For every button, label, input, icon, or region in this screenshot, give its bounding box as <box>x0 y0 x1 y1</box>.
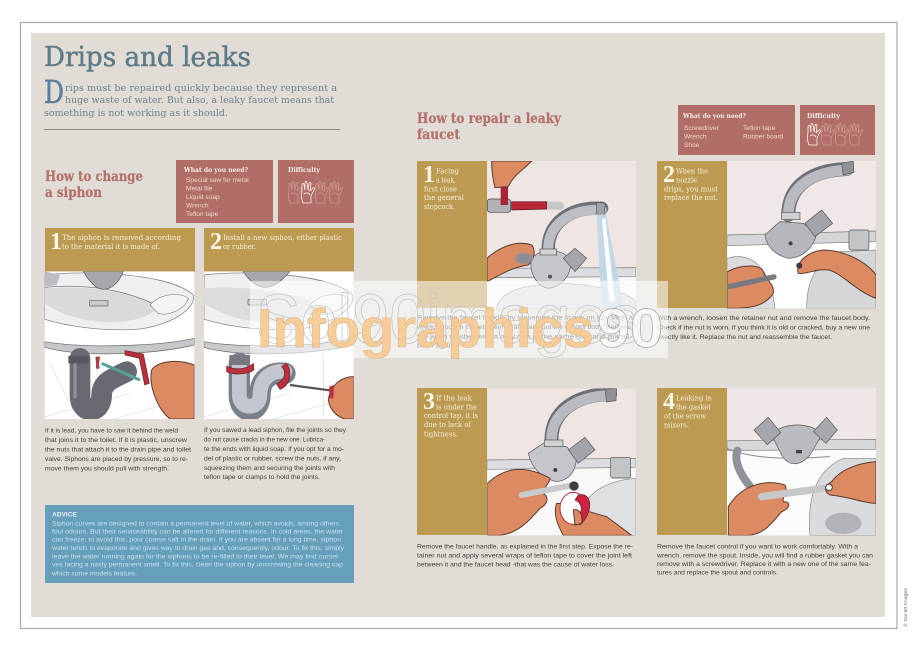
illustration: replacing the rubber gasket of the screw mixer <box>727 388 876 535</box>
step 3: faucet header: 3 <box>423 389 435 415</box>
step 2: faucet header: nozzle <box>676 176 697 184</box>
text: faucet step 3 <box>417 544 633 568</box>
step 3: faucet header: is under the <box>436 404 477 412</box>
text: faucet step 4: Remove the faucet control if you want to work comfortably. With a <box>657 544 858 550</box>
text: faucet step 3: Remove the faucet handle, as explained in the first step. Expose the re- <box>417 544 633 550</box>
step 1: siphon header: to the material it is made of. <box>62 243 160 251</box>
step 1: faucet header: the general <box>424 194 465 202</box>
text: faucet step 2: exactly like it. Replace the nut and reassemble the faucet. <box>657 334 832 341</box>
callout: advice: leave the water running again for the siphons to be re-filled to their level. We may find oursel- <box>52 554 340 560</box>
step 4: faucet header: the gasket <box>676 404 711 412</box>
watermark: Sol90images <box>256 280 641 358</box>
text: faucet step 2: With a wrench, loosen the retainer nut and remove the faucet body. <box>657 315 870 322</box>
step 1: siphon header: The siphon is removed according <box>62 234 182 242</box>
intro text: rips must be repaired quickly because they represent a <box>65 83 337 94</box>
illustration: wrapping teflon tape around the nut <box>487 388 636 535</box>
panel: tools needed for the faucet: What do you need? <box>682 113 746 120</box>
text: siphon step 2: If you sawed a lead siphon, file the joints so they <box>204 427 347 434</box>
callout: advice <box>45 505 354 583</box>
text: siphon step 1: valve. Siphons are placed by pressure, so to re- <box>45 456 188 463</box>
panel: tools needed for the faucet: Wrench <box>684 134 707 140</box>
panel: difficulty of the faucet job <box>800 105 875 155</box>
heading: how to repair a leaky faucet <box>417 111 562 143</box>
panel: tools needed for the faucet: Teflon tape <box>743 125 776 132</box>
step 2: siphon header <box>204 228 354 272</box>
callout: advice: can freeze; to avoid this, pour coarse salt in the drain. If you are absent for a long time, siphon <box>52 536 341 544</box>
heading: how to repair a leaky faucet: How to repair a leaky <box>417 111 562 127</box>
step 2: siphon header: Install a new siphon, either plastic <box>223 234 342 242</box>
text: siphon step 1 <box>45 428 191 472</box>
text: faucet step 1 <box>416 314 633 350</box>
watermark: 90 <box>597 297 663 359</box>
panel: tools needed for the siphon <box>176 160 273 223</box>
text: siphon step 2: te the ends with liquid soap. If you opt for a mo- <box>204 446 344 453</box>
heading: how to change a siphon: How to change <box>45 169 143 185</box>
intro text: something is not working as it should. <box>44 108 228 119</box>
text: faucet step 3: between it and the faucet head -that was the cause of water loss. <box>417 562 614 568</box>
illustration: closing the stopcock with the faucet running <box>487 161 636 308</box>
panel: tools needed for the siphon: Teflon tape <box>186 211 219 218</box>
step 1: siphon header <box>45 228 195 272</box>
text: siphon step 1: move them you should pull with strength. <box>45 466 169 472</box>
panel: difficulty of the siphon job <box>278 160 354 223</box>
panel: tools needed for the siphon: What do you need? <box>183 167 248 174</box>
text: siphon step 2: teflon tape or clamps to hold the joints. <box>204 474 320 481</box>
text: faucet step 1: the worn washer with a new one of the same size and put all <box>417 334 630 340</box>
step 2: faucet header: 2 <box>663 162 675 188</box>
text: faucet step 1: back again. <box>417 342 457 350</box>
step 4: faucet header: of the screw <box>664 412 706 420</box>
step 2: faucet header: replace the nut. <box>664 194 718 202</box>
callout: advice: water tends to evaporate and gives way to drain gas and, consequently, odour. To fix this, simply <box>51 545 345 552</box>
text: siphon step 2: del of plastic or rubber, screw the nuts, if any, <box>204 456 341 462</box>
panel: tools needed for the faucet: Shoe <box>684 142 700 149</box>
step 2: faucet header: When the <box>676 168 708 176</box>
step 1: faucet header: a leak, <box>436 176 456 184</box>
step 1: faucet header: 1 <box>423 162 435 188</box>
text: faucet step 2 <box>657 315 870 341</box>
illustration: replacing the faucet nut <box>727 161 876 308</box>
step 3: faucet header: If the leak <box>436 394 473 402</box>
step 4: faucet header: 4 <box>663 389 675 415</box>
step 1: faucet header <box>417 161 487 308</box>
step 3: faucet header: due to lack of <box>424 421 472 429</box>
callout: advice: foul odours. But their serviceability can be altered for different reasons. In cold areas, the water <box>52 528 344 536</box>
watermark: Infographics <box>257 297 594 359</box>
text: faucet step 4: remove with a screwdriver. Replace it with a new one of the same fea- <box>657 561 871 568</box>
panel: tools needed for the siphon: Wrench <box>186 202 209 210</box>
text: siphon step 1: If it is lead, you have to saw it behind the weld <box>45 428 178 434</box>
step 1: faucet header: first close <box>424 186 457 194</box>
title: Drips and leaks <box>44 42 251 73</box>
step 2: siphon header: 2 <box>210 229 222 255</box>
step 4: faucet header <box>657 388 727 535</box>
text: siphon step 1: the nuts that attach it to the drain pipe and toilet <box>45 446 191 454</box>
step 2: siphon header: or rubber. <box>223 243 256 251</box>
callout: advice: Siphon curves are designed to contain a permanent level of water, which avoids, among others, <box>52 520 341 528</box>
step 2: faucet header: drips, you must <box>664 186 718 194</box>
illustration: sink with new siphon and clamps <box>204 271 354 419</box>
step 2: faucet header <box>657 161 727 308</box>
intro text: huge waste of water. But also, a leaky faucet means that <box>65 95 334 106</box>
step 1: siphon header: 1 <box>50 229 62 255</box>
heading: how to change a siphon <box>45 169 143 201</box>
step 3: faucet header <box>417 388 487 535</box>
step 1: faucet header: stopcock. <box>424 203 455 211</box>
panel: tools needed for the siphon: Metal file <box>186 186 213 192</box>
step 1: faucet header: Facing <box>436 168 459 176</box>
text: siphon step 2 <box>204 427 347 481</box>
step 3: faucet header: tightness. <box>424 430 458 438</box>
text: faucet step 3: tainer nut and apply several wraps of teflon tape to cover the joint left <box>417 552 632 560</box>
callout: advice: ADVICE <box>52 512 78 518</box>
text: siphon step 2: do not cause cracks in the new one. Lubrica- <box>204 436 325 444</box>
text: faucet step 4 <box>656 544 873 576</box>
text: faucet step 4: wrench, remove the spout. Inside, you will find a rubber gasket you can <box>656 552 873 560</box>
panel: tools needed for the siphon: Liquid soap <box>186 194 220 201</box>
heading: how to change a siphon: a siphon <box>45 185 102 201</box>
panel: tools needed for the siphon: Special saw for metal <box>186 177 249 184</box>
heading: how to repair a leaky faucet: faucet <box>417 127 461 143</box>
copyright note: © Sol 90 Images <box>902 587 908 627</box>
text: faucet step 2: Check if the nut is worn. If you think it is old or cracked, buy a new one <box>657 324 870 332</box>
step 4: faucet header: mixers. <box>664 422 689 430</box>
panel: tools needed for the faucet: Screwdriver <box>684 125 720 132</box>
panel: difficulty of the siphon job: Difficulty <box>288 167 320 174</box>
intro text <box>44 73 337 119</box>
step 4: faucet header: Leaking in <box>676 394 712 402</box>
panel: difficulty of the faucet job: Difficulty <box>807 113 840 120</box>
text: siphon step 1: that joins it to the toilet. If it is plastic, unscrew <box>45 437 187 444</box>
text: faucet step 4: tures and replace the spout and controls. <box>657 570 778 576</box>
step 3: faucet header: control tap, it is <box>424 412 478 420</box>
panel: tools needed for the faucet: Rubber board <box>743 134 784 140</box>
intro text: D <box>44 73 64 111</box>
text: faucet step 1: Remove the faucet handle by loosening the screw on top. With a <box>417 314 633 322</box>
callout: advice: which some models feature. <box>51 570 137 578</box>
text: faucet step 1: wrench, loosen the retainer nut and take out the control body. Replace <box>416 324 631 331</box>
callout: advice: ves facing a nasty permanent smell. To fix this, clean the siphon by unscrewing the cleaning cap <box>52 562 343 568</box>
panel: tools needed for the faucet <box>678 105 795 155</box>
text: siphon step 2: squeezing them and securing the joints with <box>204 465 335 472</box>
illustration: sink with lead siphon being sawn <box>45 271 194 419</box>
